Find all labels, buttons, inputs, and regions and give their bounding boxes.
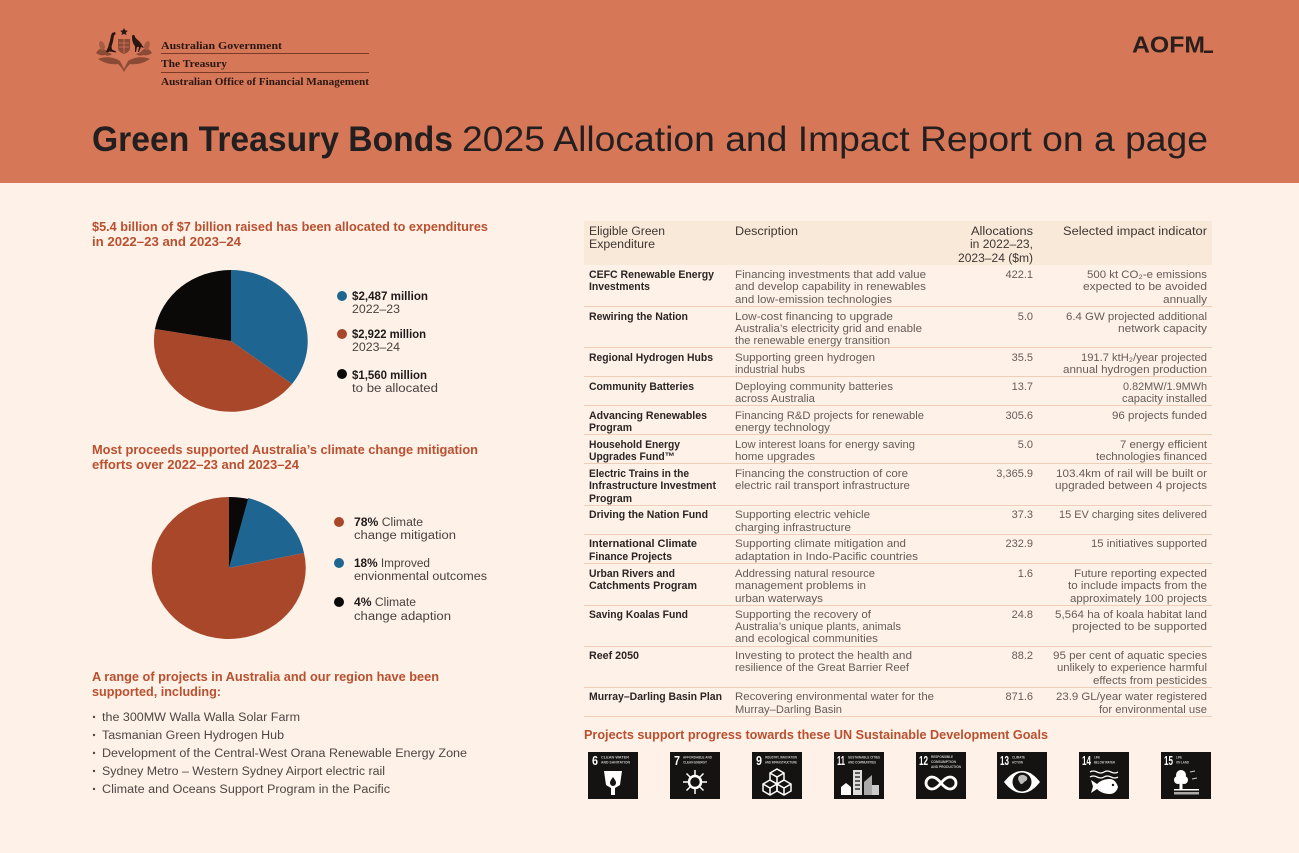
row: Renewables: energy technology bbox=[735, 422, 831, 434]
row: CEFC: 422.1 bbox=[1005, 269, 1033, 281]
row: CEFC: CEFC Renewable Energy bbox=[589, 269, 715, 281]
row: Household: home upgrades bbox=[735, 451, 816, 463]
row: Urban Rivers: to include impacts from the bbox=[1068, 580, 1207, 592]
row: Household: Upgrades Fund™ bbox=[589, 451, 675, 463]
row: Household: Household Energy bbox=[589, 439, 681, 451]
icon: SDG 9 industry and innovation: 9 bbox=[756, 754, 762, 768]
icon: SDG 14 life below water: BELOW WATER bbox=[1094, 760, 1116, 764]
list of projects: Climate and Oceans Support Program in the Pacific bbox=[102, 784, 390, 796]
row: Electric trains: Electric Trains in the bbox=[589, 468, 689, 480]
row: Electric trains: upgraded between 4 projects bbox=[1055, 480, 1208, 492]
row: International: International Climate bbox=[589, 538, 697, 550]
row: CEFC: and develop capability in renewables bbox=[735, 281, 927, 293]
row: Rewiring: the renewable energy transition bbox=[735, 335, 890, 347]
list of projects bbox=[93, 712, 467, 796]
row: CEFC: 500 kt CO₂-e emissions bbox=[1087, 269, 1208, 281]
heading: projects bbox=[92, 670, 439, 699]
row: Reef: effects from pesticides bbox=[1093, 675, 1208, 687]
row: Reef bbox=[589, 650, 1208, 687]
row: Batteries: Deploying community batteries bbox=[735, 381, 894, 393]
title: 2025 Allocation and Impact Report on a page bbox=[462, 120, 1208, 159]
legend: objectives: change adaption bbox=[354, 611, 451, 623]
row: Driving: Supporting electric vehicle bbox=[735, 509, 870, 521]
icon: SDG 13 climate action: 13 bbox=[1000, 754, 1009, 768]
row: International: Supporting climate mitigation and bbox=[735, 538, 906, 550]
icon: SDG 15 life on land bbox=[1161, 752, 1211, 799]
legend: allocation: 2022–23 bbox=[352, 304, 400, 316]
list of projects: Tasmanian Green Hydrogen Hub bbox=[102, 730, 284, 742]
icon: SDG 12 responsible consumption: 12 bbox=[919, 754, 928, 768]
icon: SDG 13 climate action: ACTION bbox=[1012, 760, 1024, 764]
row: Hydrogen bbox=[589, 352, 1207, 376]
icon: SDG 6 clean water bbox=[588, 752, 638, 799]
row: Koalas: 24.8 bbox=[1012, 609, 1033, 621]
legend: objectives bbox=[334, 517, 487, 623]
row: International: Finance Projects bbox=[589, 551, 672, 563]
table header: 2023–24 ($m) bbox=[958, 253, 1033, 265]
row: Hydrogen: industrial hubs bbox=[735, 364, 805, 376]
row: Hydrogen: annual hydrogen production bbox=[1063, 364, 1207, 376]
pie chart: allocation by year bbox=[154, 270, 308, 412]
row: Batteries: 0.82MW/1.9MWh bbox=[1123, 381, 1207, 393]
row: Reef: 95 per cent of aquatic species bbox=[1053, 650, 1208, 662]
list of projects: Development of the Central-West Orana Renewable Energy Zone bbox=[102, 748, 467, 760]
row: Reef: 88.2 bbox=[1012, 650, 1033, 662]
heading: projects: A range of projects in Australia and our region have been bbox=[92, 670, 439, 684]
heading: proceeds bbox=[92, 443, 478, 472]
table header: in 2022–23, bbox=[970, 239, 1033, 251]
row: Urban Rivers: urban waterways bbox=[735, 593, 824, 605]
list of projects: Sydney Metro – Western Sydney Airport electric rail bbox=[102, 766, 385, 778]
row: Hydrogen: 191.7 ktH₂/year projected bbox=[1081, 352, 1207, 364]
row: Rewiring bbox=[589, 311, 1208, 347]
row: Hydrogen: Supporting green hydrogen bbox=[735, 352, 875, 364]
row: Household: 5.0 bbox=[1018, 439, 1033, 451]
row: Electric trains: 3,365.9 bbox=[996, 468, 1033, 480]
row: International: 15 initiatives supported bbox=[1091, 538, 1207, 550]
row: Murray-Darling: for environmental use bbox=[1099, 704, 1207, 716]
icon: SDG 14 life below water: 14 bbox=[1082, 754, 1091, 768]
icon: SDG 7 affordable energy: 7 bbox=[674, 754, 680, 768]
row: Renewables: Program bbox=[589, 422, 632, 434]
row: Koalas: Australia’s unique plants, animals bbox=[735, 621, 902, 633]
row: Rewiring: 6.4 GW projected additional bbox=[1066, 311, 1207, 323]
row: Renewables: Advancing Renewables bbox=[589, 410, 707, 422]
row: Koalas: Supporting the recovery of bbox=[735, 609, 872, 621]
icon: SDG 6 clean water: 6 bbox=[592, 754, 598, 768]
icon: SDG 11 sustainable cities: AND COMMUNITIES bbox=[848, 760, 876, 764]
icon: SDG 9 industry and innovation bbox=[752, 752, 802, 799]
row: CEFC: annually bbox=[1163, 294, 1208, 306]
row: Koalas: 5,564 ha of koala habitat land bbox=[1055, 609, 1207, 621]
row: Batteries: 13.7 bbox=[1012, 381, 1033, 393]
row: Urban Rivers: Urban Rivers and bbox=[589, 568, 675, 580]
row: Driving bbox=[589, 509, 1207, 534]
row: Electric trains: Financing the construction of core bbox=[735, 468, 908, 480]
legend: allocation bbox=[337, 291, 438, 395]
icon: SDG 11 sustainable cities: 11 bbox=[837, 754, 845, 768]
icon: SDG 15 life on land: LIFE bbox=[1176, 756, 1182, 760]
icon: SDG 15 life on land: ON LAND bbox=[1176, 760, 1190, 764]
legend: allocation: $1,560 million bbox=[352, 370, 427, 382]
legend: objectives: change mitigation bbox=[354, 530, 456, 542]
row: Electric trains: Infrastructure Investment bbox=[589, 480, 716, 492]
icon: SDG 12 responsible consumption: AND PRODUCTION bbox=[931, 765, 962, 769]
list of projects: the 300MW Walla Walla Solar Farm bbox=[102, 712, 300, 724]
icon: SDG 15 life on land: 15 bbox=[1164, 754, 1173, 768]
government logo text: Australian Government bbox=[161, 40, 282, 52]
row: Batteries: capacity installed bbox=[1122, 393, 1207, 405]
row: Urban Rivers: management problems in bbox=[735, 580, 866, 592]
table header: Allocations bbox=[971, 226, 1033, 238]
government logo text: Australian Office of Financial Management bbox=[161, 76, 369, 88]
header band bbox=[0, 0, 1299, 183]
row: Urban Rivers: Catchments Program bbox=[589, 580, 697, 592]
row: Hydrogen: 35.5 bbox=[1012, 352, 1033, 364]
icon: SDG 12 responsible consumption: RESPONSIBLE bbox=[931, 755, 953, 759]
row: Driving: 37.3 bbox=[1012, 509, 1033, 521]
row: Rewiring: network capacity bbox=[1118, 323, 1208, 335]
row: International: adaptation in Indo-Pacific countries bbox=[735, 551, 919, 563]
row: International bbox=[589, 538, 1207, 563]
row: Reef: unlikely to experience harmful bbox=[1057, 662, 1207, 674]
legend: allocation: to be allocated bbox=[352, 383, 438, 395]
table header: Expenditure bbox=[589, 239, 655, 251]
row: Batteries: across Australia bbox=[735, 393, 816, 405]
row: Electric trains: Program bbox=[589, 493, 632, 505]
row: Urban Rivers bbox=[589, 568, 1208, 605]
row: International: 232.9 bbox=[1005, 538, 1033, 550]
panel: climate pie section bbox=[92, 443, 487, 639]
row: Urban Rivers: Addressing natural resource bbox=[735, 568, 875, 580]
icon: SDG 14 life below water bbox=[1079, 752, 1129, 799]
table: eligible green expenditure bbox=[584, 221, 1212, 717]
icon: SDG 12 responsible consumption bbox=[916, 752, 966, 799]
icon: SDG 7 affordable energy: CLEAN ENERGY bbox=[683, 760, 708, 764]
row: Rewiring: Rewiring the Nation bbox=[589, 311, 688, 323]
row: Reef: resilience of the Great Barrier Reef bbox=[735, 662, 910, 674]
row: Batteries: Community Batteries bbox=[589, 381, 694, 393]
row: Renewables: 96 projects funded bbox=[1112, 410, 1207, 422]
legend: objectives: 4% Climate bbox=[354, 597, 416, 609]
row: Urban Rivers: approximately 100 projects bbox=[1070, 593, 1208, 605]
row: Rewiring: Low-cost financing to upgrade bbox=[735, 311, 893, 323]
legend: objectives: 78% Climate bbox=[354, 517, 423, 529]
row: Rewiring: Australia’s electricity grid and enable bbox=[735, 323, 922, 335]
table header bbox=[584, 221, 1212, 265]
icon: SDG 9 industry and innovation: AND INFRASTRUCTURE bbox=[765, 760, 797, 764]
row: Reef: Investing to protect the health and bbox=[735, 650, 912, 662]
row: CEFC: expected to be avoided bbox=[1083, 281, 1207, 293]
heading: proceeds: efforts over 2022–23 and 2023–24 bbox=[92, 458, 299, 472]
row: Driving: 15 EV charging sites delivered bbox=[1059, 509, 1207, 521]
legend: allocation: $2,922 million bbox=[352, 329, 426, 341]
row: Murray-Darling: 871.6 bbox=[1005, 691, 1033, 703]
row: Murray-Darling: Murray–Darling Basin Plan bbox=[589, 691, 722, 703]
title: Green Treasury Bonds bbox=[92, 120, 453, 159]
icon: Australian coat of arms bbox=[96, 28, 152, 72]
row: Driving: Driving the Nation Fund bbox=[589, 509, 708, 521]
icon: SDG 6 clean water: AND SANITATION bbox=[601, 760, 631, 764]
row: Reef: Reef 2050 bbox=[589, 650, 639, 662]
legend: allocation: $2,487 million bbox=[352, 291, 428, 303]
row: Electric trains: 103.4km of rail will be built or bbox=[1056, 468, 1207, 480]
panel: supported projects bbox=[92, 670, 467, 796]
row: Renewables: 305.6 bbox=[1005, 410, 1033, 422]
legend: allocation: 2023–24 bbox=[352, 342, 401, 354]
row: CEFC: and low-emission technologies bbox=[735, 294, 893, 306]
heading: amount allocated: in 2022–23 and 2023–24 bbox=[92, 235, 241, 249]
row: Household: Low interest loans for energy saving bbox=[735, 439, 915, 451]
government logo text bbox=[161, 40, 369, 88]
row: Household: 7 energy efficient bbox=[1120, 439, 1207, 451]
legend: objectives: 18% Improved bbox=[354, 558, 430, 570]
table header: Selected impact indicator bbox=[1063, 226, 1207, 238]
row: Murray-Darling: 23.9 GL/year water registered bbox=[1056, 691, 1207, 703]
row: Koalas bbox=[589, 609, 1207, 645]
row: Household bbox=[589, 439, 1207, 463]
heading: proceeds: Most proceeds supported Australia’s climate change mitigation bbox=[92, 443, 478, 457]
row: Driving: charging infrastructure bbox=[735, 522, 851, 534]
icon: SDG 11 sustainable cities bbox=[834, 752, 884, 799]
title bbox=[92, 120, 1208, 159]
row: Rewiring: 5.0 bbox=[1018, 311, 1033, 323]
row: Renewables: Financing R&D projects for renewable bbox=[735, 410, 924, 422]
row: Electric trains bbox=[589, 468, 1208, 505]
row: Batteries bbox=[589, 381, 1207, 405]
row: Household: technologies financed bbox=[1096, 451, 1207, 463]
row: Koalas: and ecological communities bbox=[735, 633, 879, 645]
row: Hydrogen: Regional Hydrogen Hubs bbox=[589, 352, 713, 364]
heading: UN goals: Projects support progress towards these UN Sustainable Development Goals bbox=[584, 728, 1048, 742]
icon: SDG 13 climate action: CLIMATE bbox=[1012, 756, 1025, 760]
heading: projects: supported, including: bbox=[92, 685, 221, 699]
legend: objectives: envionmental outcomes bbox=[354, 571, 487, 583]
pie chart: proceeds by objective bbox=[152, 497, 306, 639]
row: Murray-Darling: Recovering environmental water for the bbox=[735, 691, 934, 703]
table header: Eligible Green bbox=[589, 226, 665, 238]
row: Koalas: Saving Koalas Fund bbox=[589, 609, 688, 621]
icon: SDG 12 responsible consumption: CONSUMPTION bbox=[931, 760, 957, 764]
heading: amount allocated bbox=[92, 220, 488, 249]
icon: SDG 13 climate action bbox=[997, 752, 1047, 799]
icon: SDG 7 affordable energy: AFFORDABLE AND bbox=[683, 756, 713, 760]
row: Renewables bbox=[589, 410, 1207, 434]
icon: SDG 14 life below water: LIFE bbox=[1094, 756, 1100, 760]
heading: amount allocated: $5.4 billion of $7 billion raised has been allocated to expenditures bbox=[92, 220, 488, 234]
government logo text: The Treasury bbox=[161, 58, 228, 70]
row: Murray-Darling bbox=[589, 691, 1207, 716]
icon: SDG 7 affordable energy bbox=[670, 752, 720, 799]
AOFM logo: AOFM bbox=[1132, 32, 1205, 58]
row: Urban Rivers: Future reporting expected bbox=[1074, 568, 1207, 580]
icon: SDG 9 industry and innovation: INDUSTRY, INNOVATION bbox=[765, 756, 798, 760]
table header: Description bbox=[735, 226, 798, 238]
icon: SDG 11 sustainable cities: SUSTAINABLE CITIES bbox=[848, 756, 880, 760]
row: Electric trains: electric rail transport infrastructure bbox=[735, 480, 910, 492]
row: CEFC: Financing investments that add value bbox=[735, 269, 926, 281]
panel: allocation pie section bbox=[92, 220, 488, 412]
row: CEFC: Investments bbox=[589, 281, 650, 293]
row: CEFC bbox=[589, 269, 1208, 306]
row: Koalas: projected to be supported bbox=[1072, 621, 1207, 633]
icon: SDG 6 clean water: CLEAN WATER bbox=[601, 756, 630, 760]
row: Urban Rivers: 1.6 bbox=[1018, 568, 1033, 580]
row: Murray-Darling: Murray–Darling Basin bbox=[735, 704, 842, 716]
